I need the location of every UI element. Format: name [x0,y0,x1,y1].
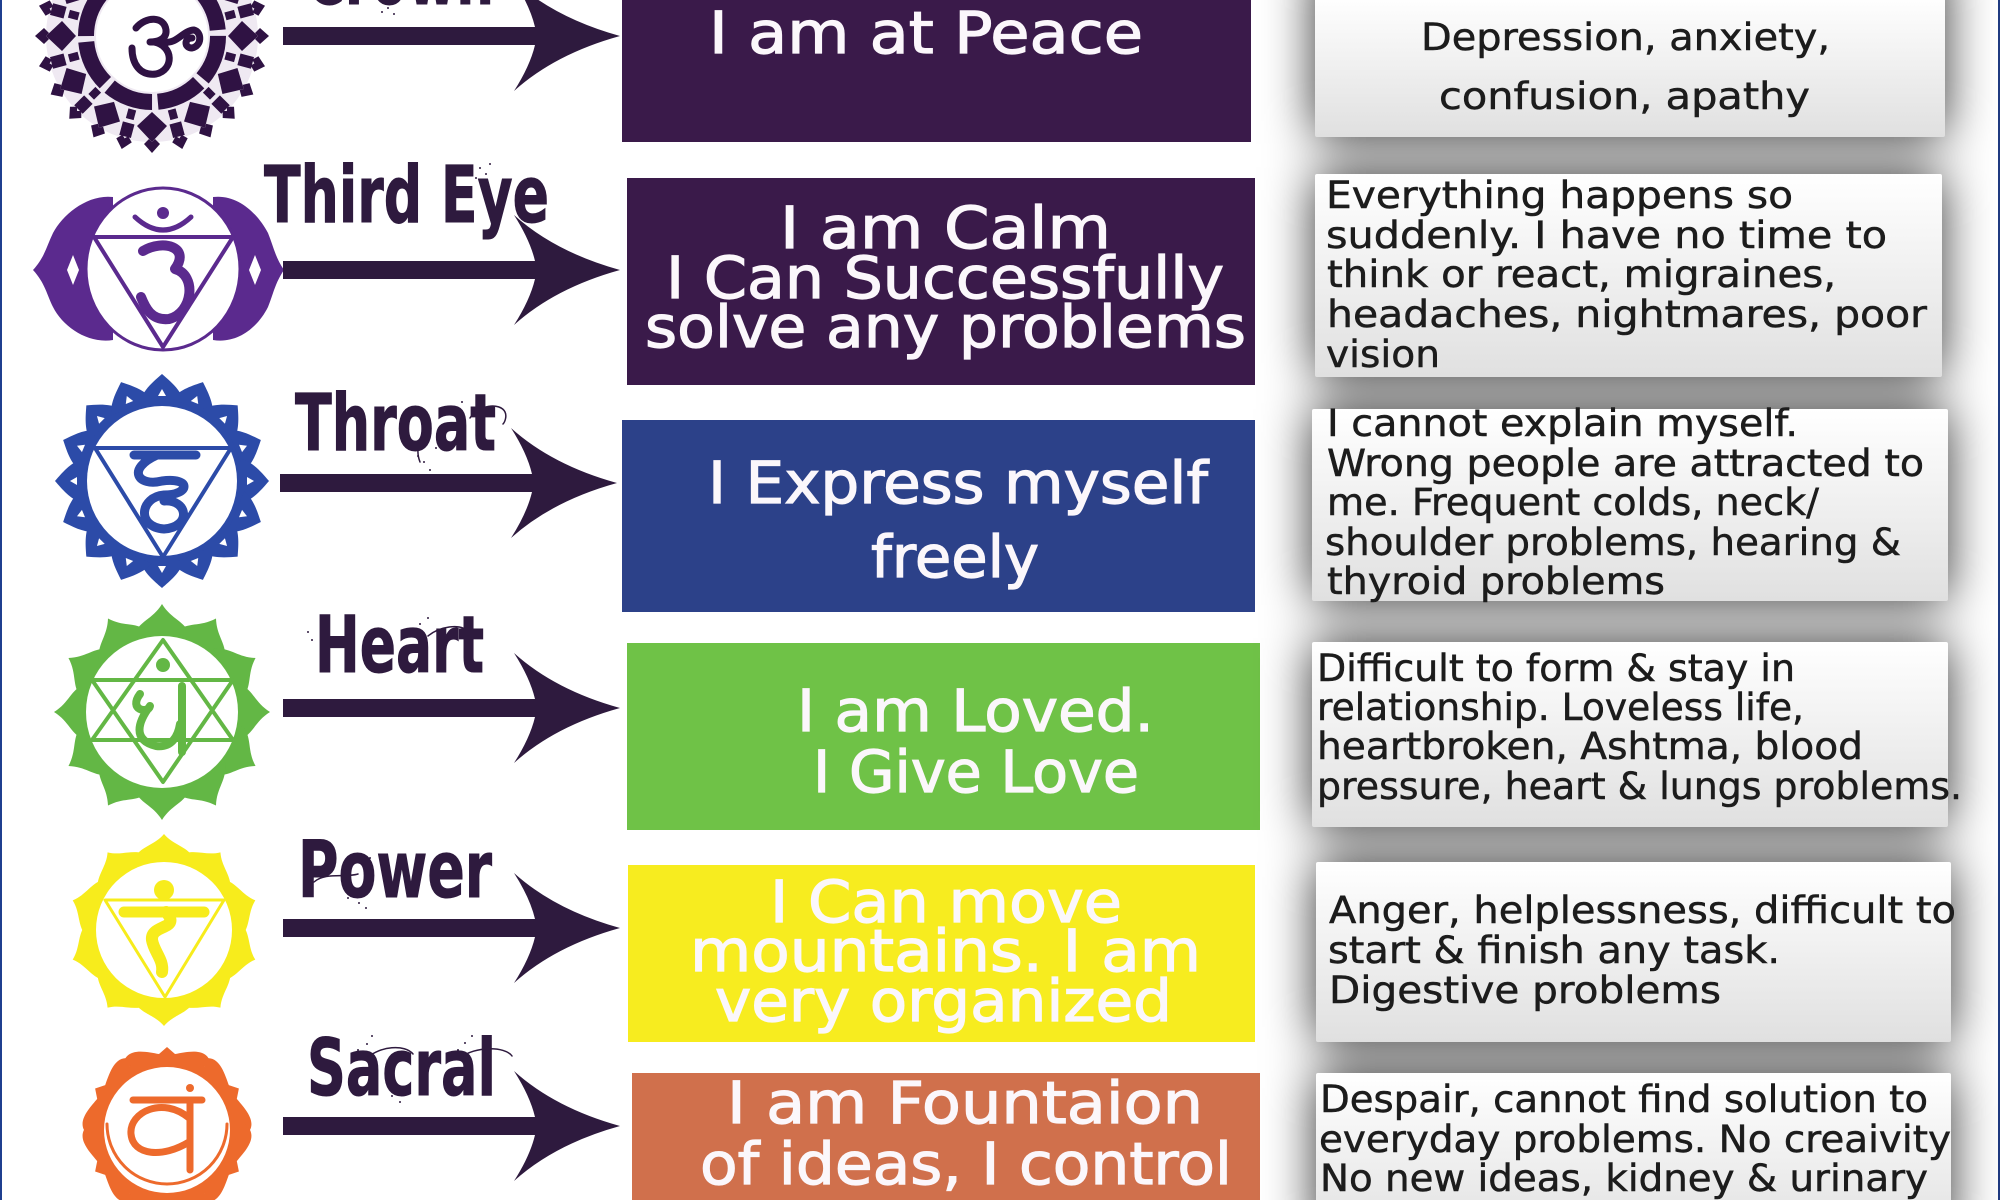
panel: third eye symptoms: Everything happens so [1326,174,1793,217]
panel: heart symptoms: Difficult to form & stay in [1317,647,1795,690]
panel: sacral affirmation: I am Fountaion [727,1069,1203,1137]
icon: heart chakra [54,604,270,820]
icon: third eye chakra [33,188,284,350]
arrow: heart [283,653,620,763]
arrow: crown [283,0,620,91]
panel: third eye affirmation: solve any problems [645,293,1246,361]
icon: power chakra [63,834,265,1026]
panel: throat affirmation [622,420,1255,612]
panel: third eye affirmation: I am Calm [780,194,1111,262]
heading: Sacral: Sacral [307,1024,496,1114]
panel: heart symptoms: pressure, heart & lungs problems. [1317,765,1962,808]
panel: throat affirmation: I Express myself [708,449,1210,517]
panel: heart affirmation [627,643,1260,830]
panel shadows [1312,0,1951,1200]
arrow: throat [280,428,617,538]
panel: throat symptoms: I cannot explain myself. [1327,402,1798,445]
panel: throat symptoms [1312,402,1948,603]
panel: sacral symptoms: Despair, cannot find solution to [1320,1078,1928,1121]
panel: power affirmation [628,865,1255,1042]
panel: sacral affirmation: of ideas, I control [700,1130,1232,1198]
panel: third eye symptoms: suddenly. I have no time to [1326,214,1887,257]
panel: power symptoms: Anger, helplessness, difficult to [1329,889,1956,932]
panel: power affirmation: mountains. I am [690,917,1201,985]
heading: Power: Power [298,826,492,916]
left page border [0,0,2,1200]
panel: crown symptoms: Depression, anxiety, [1421,16,1830,59]
heading: Throat: Throat [295,379,496,469]
panel: heart affirmation: I am Loved. [797,677,1154,745]
panel: sacral symptoms [1316,1073,1951,1200]
panel: power symptoms: start & finish any task. [1328,929,1780,972]
arrow: third eye [283,215,620,325]
panel: crown symptoms [1315,0,1945,137]
arrow: power [283,873,620,983]
panel: heart symptoms: relationship. Loveless life, [1317,686,1804,729]
panel: third eye symptoms: headaches, nightmares, poor [1327,293,1928,336]
panel: throat symptoms: shoulder problems, hearing & [1325,521,1901,564]
panel: power symptoms: Digestive problems [1329,969,1721,1012]
panel: sacral affirmation [632,1069,1260,1200]
panel: heart affirmation: I Give Love [813,738,1139,806]
panel: third eye affirmation: I Can Successfully [666,244,1224,312]
icon: throat chakra [55,374,269,588]
panel: third eye symptoms: think or react, migraines, [1327,253,1836,296]
icon: crown chakra [35,0,269,153]
panel: third eye symptoms: vision [1326,333,1440,376]
panel: heart symptoms [1312,642,1962,827]
panel: heart symptoms: heartbroken, Ashtma, blood [1317,725,1863,768]
heading: Heart: Heart [315,601,484,691]
panel: power symptoms [1316,862,1956,1042]
panel: third eye symptoms [1315,174,1942,377]
heading: Third Eye: Third Eye [264,151,549,241]
panel: throat symptoms: me. Frequent colds, neck/ [1327,481,1820,524]
panel: crown affirmation: I am at Peace [709,0,1143,67]
panel: power affirmation: very organized [715,967,1172,1035]
panel: throat affirmation: freely [871,523,1039,591]
panel: throat symptoms: thyroid problems [1327,560,1665,603]
panel: sacral symptoms: No new ideas, kidney & urinary [1320,1157,1928,1200]
panel: sacral symptoms: everyday problems. No creaivity [1319,1118,1951,1161]
icon: sacral chakra [73,1047,261,1200]
arrow: sacral [283,1071,620,1181]
panel: throat symptoms: Wrong people are attracted to [1327,442,1924,485]
panel: power affirmation: I Can move [770,868,1122,936]
panel: crown symptoms: confusion, apathy [1439,75,1810,118]
panel: crown affirmation [622,0,1251,142]
panel: third eye affirmation [627,178,1255,385]
right page border [1998,0,2000,1200]
